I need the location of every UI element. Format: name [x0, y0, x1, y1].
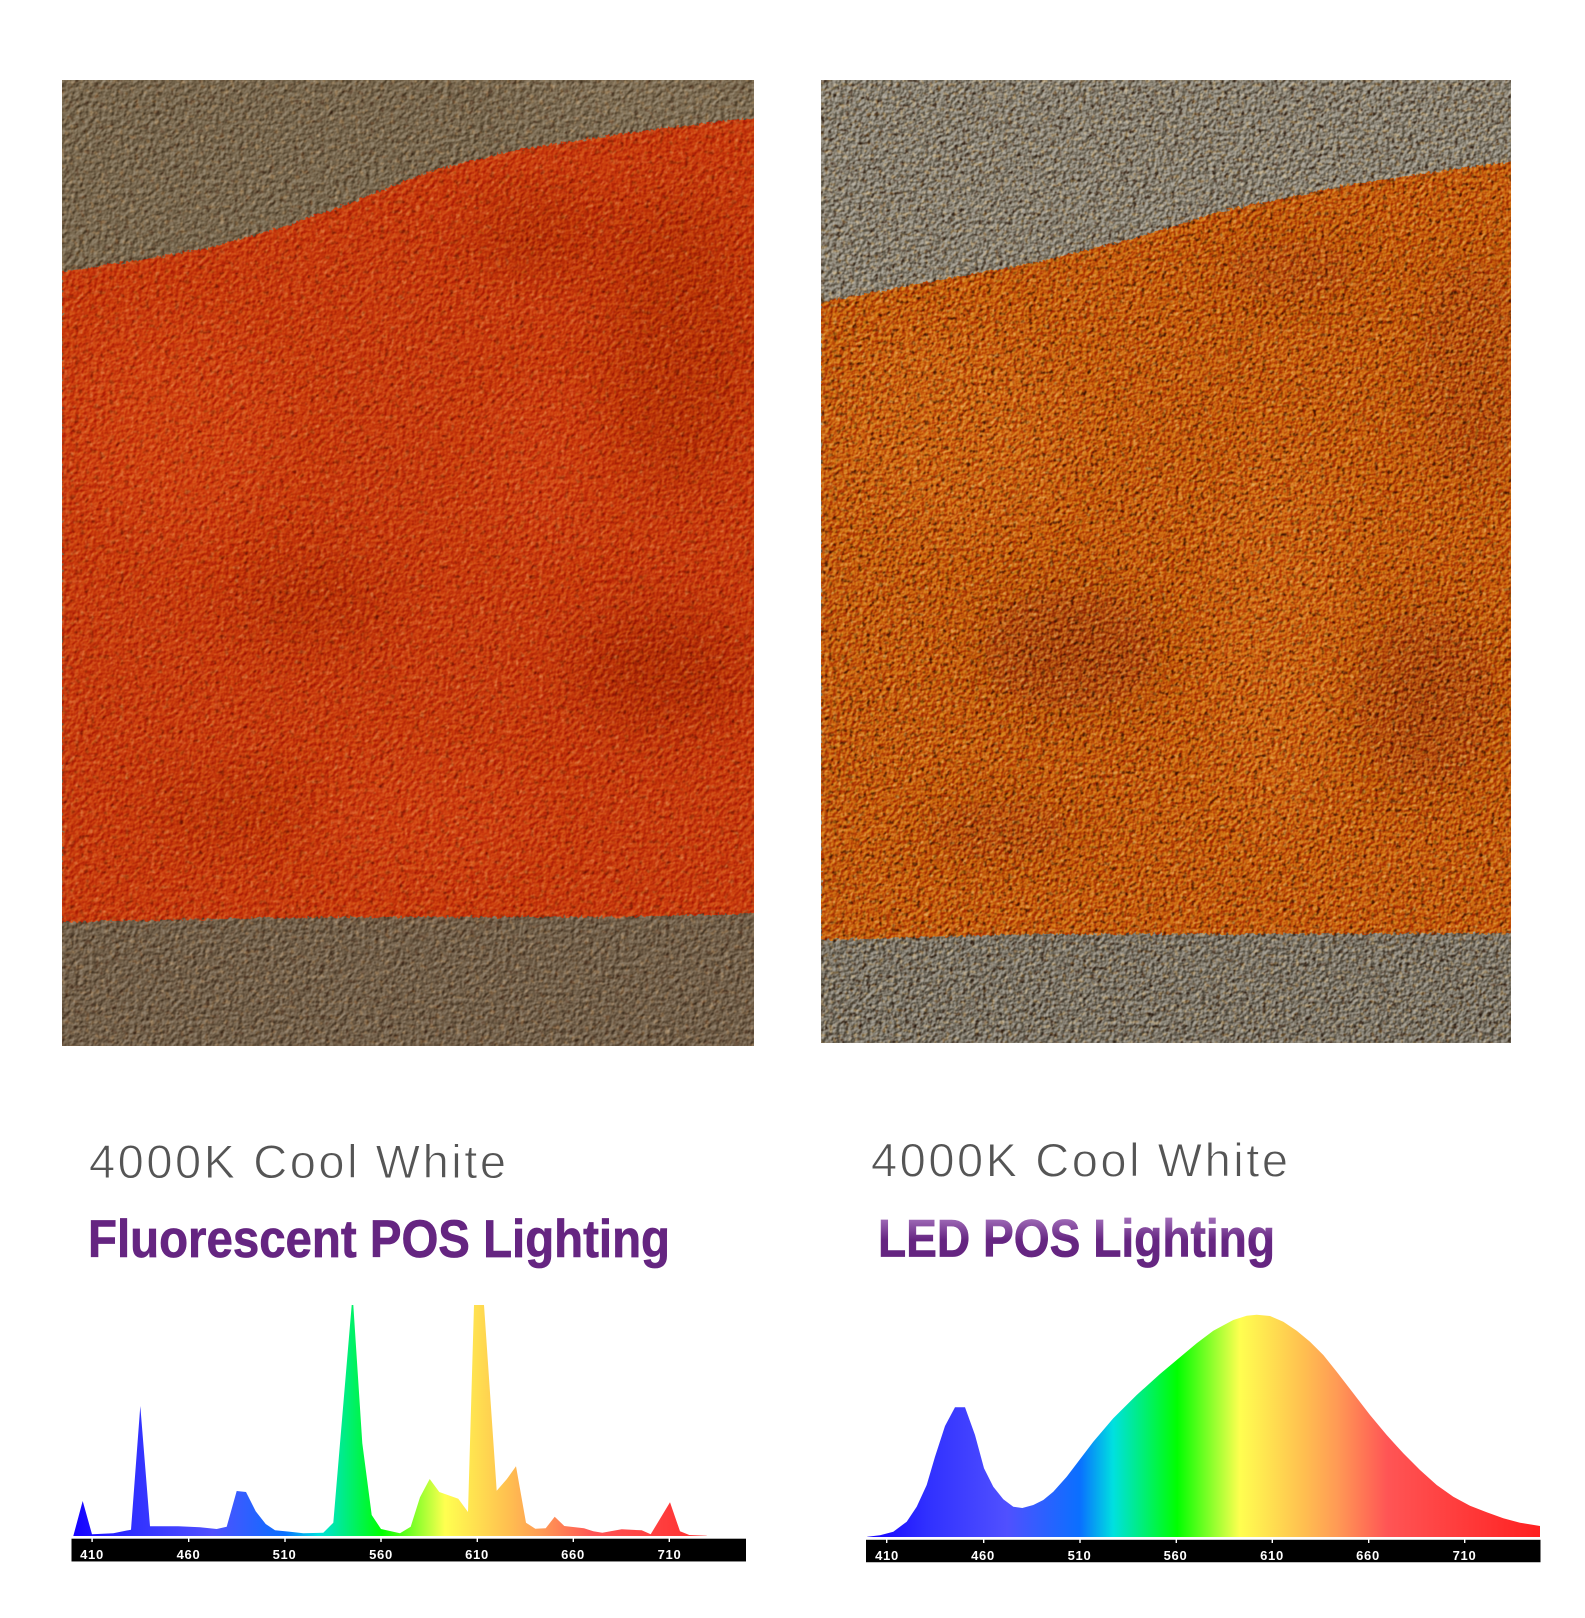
wavelength axis LED: 410 — [875, 1548, 899, 1563]
wavelength axis fluorescent — [72, 1538, 746, 1562]
chart: fluorescent spectrum — [72, 1305, 746, 1562]
subtitle right: 4000K Cool White — [871, 1134, 1288, 1186]
heading left: Fluorescent POS Lighting — [88, 1210, 670, 1269]
wavelength axis fluorescent: 560 — [369, 1547, 393, 1562]
wavelength axis fluorescent: 710 — [658, 1547, 681, 1562]
subtitle left: 4000K Cool White — [89, 1135, 506, 1188]
chart: LED spectrum — [866, 1315, 1540, 1563]
wavelength axis fluorescent: 610 — [465, 1547, 489, 1562]
heading right: LED POS Lighting — [878, 1210, 1275, 1268]
wavelength axis LED: 660 — [1356, 1548, 1380, 1563]
wavelength axis LED: 610 — [1260, 1548, 1284, 1563]
wavelength axis LED: 510 — [1068, 1548, 1091, 1563]
wavelength axis fluorescent: 410 — [80, 1547, 104, 1562]
wavelength axis LED: 560 — [1164, 1548, 1187, 1563]
wavelength axis fluorescent: 510 — [273, 1547, 296, 1562]
wavelength axis LED: 710 — [1453, 1548, 1476, 1563]
photo: carpet under LED lighting — [821, 80, 1520, 1043]
wavelength axis LED — [866, 1539, 1540, 1563]
photo: carpet under fluorescent lighting — [60, 70, 770, 1046]
wavelength axis fluorescent: 460 — [177, 1547, 200, 1562]
spectrum area fluorescent — [73, 1305, 707, 1536]
wavelength axis fluorescent: 660 — [561, 1547, 585, 1562]
spectrum area LED — [867, 1315, 1540, 1537]
wavelength axis LED: 460 — [971, 1548, 995, 1563]
